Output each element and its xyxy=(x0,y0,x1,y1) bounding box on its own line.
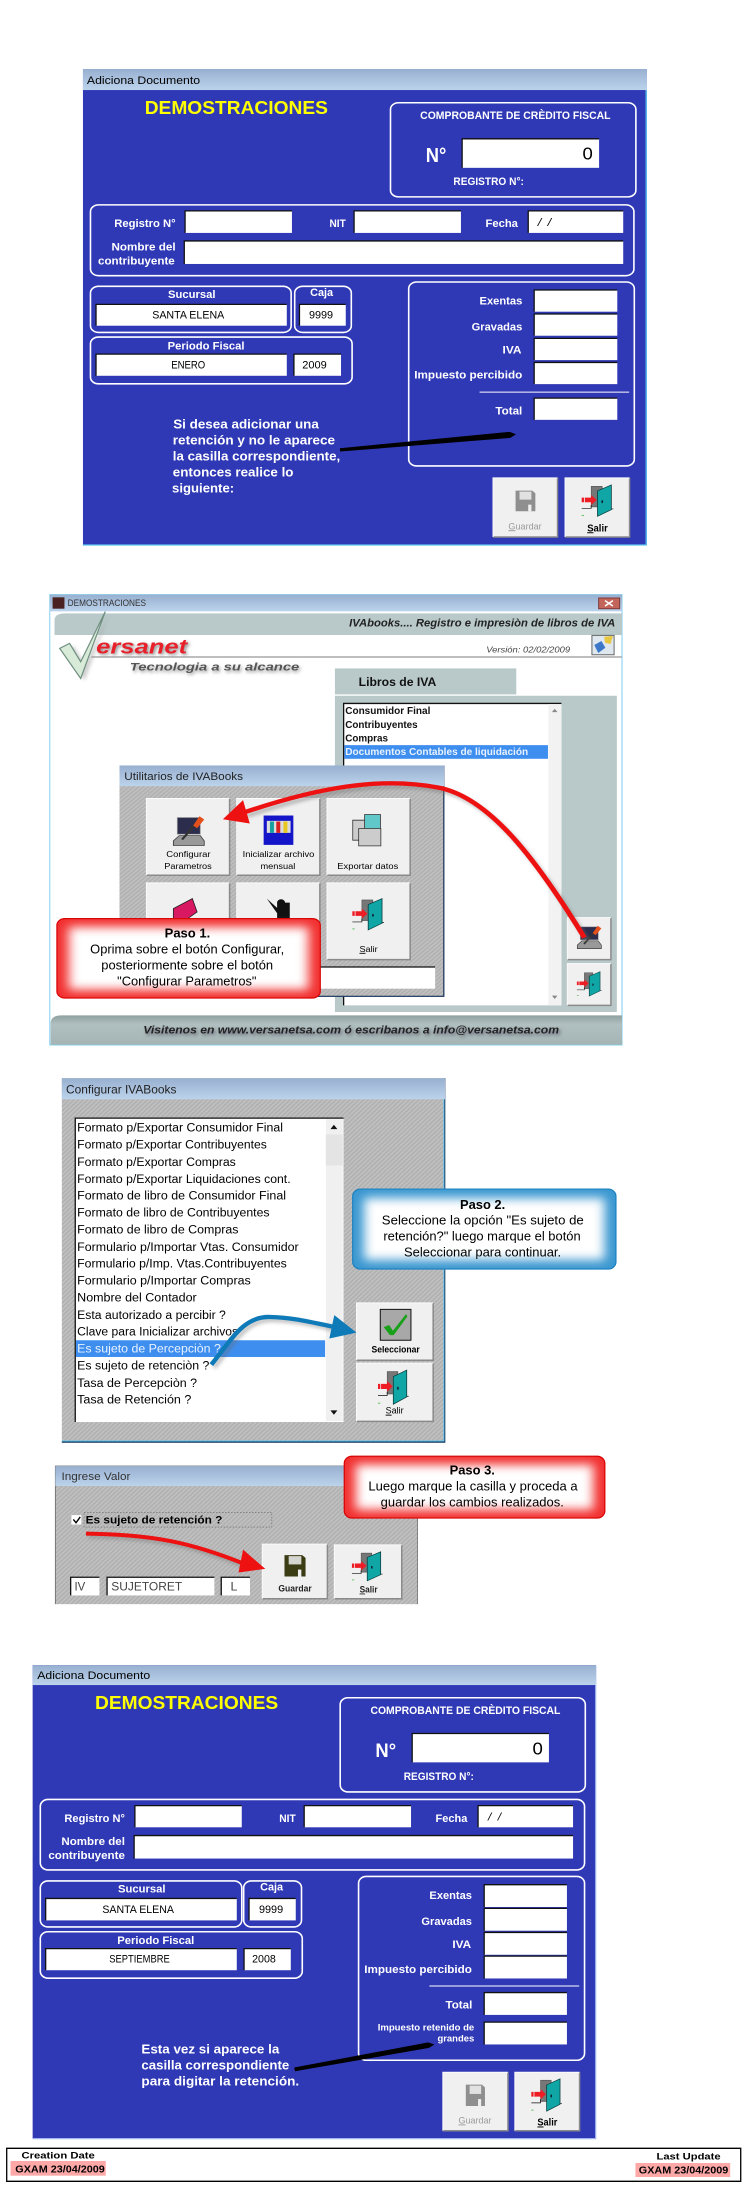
panel: totales: Impuesto percibido xyxy=(414,369,522,381)
header text: IVAbooks.... Registro e impresiòn de libros de IVA xyxy=(349,618,615,629)
logo text: ersanet xyxy=(98,637,191,660)
button: salir xyxy=(334,1545,402,1599)
panel: totales xyxy=(359,1876,585,2060)
panel: totales: IVA xyxy=(452,1939,471,1951)
button: guardar xyxy=(443,2072,508,2131)
panel: registro y contribuyente: Nombre del xyxy=(61,1836,125,1848)
callout: paso 2: Seleccione la opción "Es sujeto de xyxy=(382,1213,584,1228)
button: salir: Salir xyxy=(587,523,608,534)
panel: configurar window xyxy=(62,1078,445,1442)
callout: paso 1: posteriormente sobre el botón xyxy=(101,958,273,972)
callout: paso 3: Luego marque la casilla y proceda a xyxy=(368,1479,578,1494)
callout: paso 1 xyxy=(57,919,320,998)
input fields: IV xyxy=(74,1580,85,1594)
tagline: Tecnologia a su alcance xyxy=(131,662,301,675)
panel: periodo fiscal xyxy=(40,1932,302,1978)
panel: sucursal xyxy=(40,1881,242,1927)
list box: Esta autorizado a percibir ? xyxy=(77,1308,226,1322)
panel: footer dates xyxy=(7,2148,741,2181)
panel: totales: Total xyxy=(495,405,522,417)
panel: comprobante: COMPROBANTE DE CRÈDITO FISCAL xyxy=(370,1704,561,1717)
list box: Formato p/Exportar Contribuyentes xyxy=(77,1138,267,1152)
list box: Tasa de Retención ? xyxy=(77,1393,191,1406)
button: guardar xyxy=(493,478,558,537)
window edge xyxy=(33,1665,596,2139)
panel: utilitarios window: Inicializar archivo xyxy=(243,850,314,860)
list box: Es sujeto de Percepciòn ? xyxy=(77,1342,221,1356)
heading: DEMOSTRACIONES xyxy=(145,98,328,119)
text block: instruction: para digitar la retención. xyxy=(141,2074,299,2088)
arrow: black pointer xyxy=(294,2042,434,2071)
checkbox: Es sujeto de retención ? xyxy=(86,1515,223,1526)
panel: totales: IVA xyxy=(503,344,522,356)
checkbox xyxy=(71,1513,272,1527)
button: salir small xyxy=(567,964,611,1005)
creation date label: Creation Date xyxy=(22,2151,95,2161)
button: configurar small xyxy=(567,918,611,960)
panel: ingrese valor window xyxy=(55,1466,417,1604)
panel: comprobante: 0 xyxy=(582,145,593,164)
list box: Tasa de Percepciòn ? xyxy=(77,1376,197,1390)
button: salir xyxy=(515,2072,580,2131)
panel: periodo fiscal: Periodo Fiscal xyxy=(168,340,244,352)
button: seleccionar: Seleccionar xyxy=(371,1345,420,1356)
panel: comprobante xyxy=(390,103,636,197)
callout: paso 1: Paso 1. xyxy=(165,926,210,940)
panel: utilitarios window: Exportar datos xyxy=(337,862,399,872)
list box: Formato p/Exportar Consumidor Final xyxy=(77,1121,283,1135)
panel: final Adiciona Documento window xyxy=(33,1665,596,2139)
input fields: L xyxy=(230,1580,238,1594)
panel: registro y contribuyente: contribuyente xyxy=(48,1850,125,1862)
panel: registro y contribuyente: Fecha xyxy=(436,1813,468,1825)
panel: periodo fiscal: SEPTIEMBRE xyxy=(109,1954,170,1966)
button: guardar: Guardar xyxy=(459,2116,492,2126)
panel: totales: Exentas xyxy=(429,1890,472,1902)
button: guardar: Guardar xyxy=(278,1584,312,1593)
panel: periodo fiscal xyxy=(90,337,352,384)
panel: utilitarios window: Parametros xyxy=(164,862,212,872)
panel: caja: 9999 xyxy=(259,1904,283,1916)
button: salir xyxy=(357,1363,433,1421)
panel: totales: Gravadas xyxy=(472,321,523,333)
footer bar xyxy=(51,1015,622,1045)
panel: registro y contribuyente: / / xyxy=(487,1812,503,1823)
list box: Formato de libro de Consumidor Final xyxy=(77,1189,286,1203)
panel: comprobante: N° xyxy=(375,1741,396,1762)
panel: sucursal xyxy=(90,286,291,332)
panel: totales: Gravadas xyxy=(421,1916,472,1928)
panel: utilitarios window: Configurar xyxy=(166,850,211,860)
panel: registro y contribuyente xyxy=(40,1799,585,1870)
window background xyxy=(50,595,622,1045)
panel: registro y contribuyente: contribuyente xyxy=(98,255,175,267)
panel: comprobante: N° xyxy=(426,144,446,167)
list box: Clave para Inicializar archivos xyxy=(77,1325,238,1338)
button: salir: Salir xyxy=(386,1406,404,1417)
panel: comprobante xyxy=(340,1698,585,1792)
callout: paso 2: retención?" luego marque el botón xyxy=(383,1229,581,1244)
text block: instruction: la casilla correspondiente, xyxy=(173,449,340,463)
text block: instruction: casilla correspondiente xyxy=(141,2058,290,2072)
footer text: Visitenos en www.versanetsa.com ó escribanos a info@versanetsa.com xyxy=(145,1025,561,1038)
panel: comprobante: 0 xyxy=(532,1739,543,1758)
input fields: SUJETORET xyxy=(111,1580,183,1594)
panel: sucursal: SANTA ELENA xyxy=(102,1904,174,1916)
panel: periodo fiscal: Periodo Fiscal xyxy=(117,1935,194,1947)
list box: Nombre del Contador xyxy=(77,1291,197,1305)
tagline: Tecnologia a su alcance xyxy=(130,661,299,673)
panel: utilitarios window xyxy=(119,765,444,997)
panel: comprobante: COMPROBANTE DE CRÈDITO FISCAL xyxy=(420,110,611,122)
button: guardar xyxy=(262,1544,327,1599)
panel: configurar window: Configurar IVABooks xyxy=(66,1083,176,1096)
text block: instruction: entonces realice lo xyxy=(173,465,294,479)
text block: instruction xyxy=(172,417,340,495)
last update label: Last Update xyxy=(657,2152,721,2162)
icon: close button xyxy=(599,598,620,609)
list box: Formato p/Exportar Compras xyxy=(77,1155,236,1169)
panel: libros de IVA: Consumidor Final xyxy=(345,706,430,717)
panel: registro y contribuyente: Registro N° xyxy=(114,218,176,230)
panel: registro y contribuyente: Registro N° xyxy=(64,1813,125,1825)
panel: registro y contribuyente xyxy=(90,205,634,276)
header bar xyxy=(55,613,622,635)
list box: Formato de libro de Compras xyxy=(77,1223,238,1237)
panel: libros de IVA: Compras xyxy=(345,733,388,744)
panel: registro y contribuyente: NIT xyxy=(279,1813,296,1825)
panel: libros de IVA: Contribuyentes xyxy=(345,720,418,731)
callout: paso 3 xyxy=(344,1456,605,1518)
icon: application xyxy=(53,597,64,609)
creation date badge: GXAM 23/04/2009 xyxy=(15,2163,105,2175)
callout: paso 3: guardar los cambios realizados. xyxy=(381,1495,564,1510)
panel: ingrese valor window: Ingrese Valor xyxy=(61,1471,131,1483)
arrow: red pointer xyxy=(86,1534,265,1573)
panel: sucursal: Sucursal xyxy=(168,289,216,301)
list box: Es sujeto de retenciòn ? xyxy=(77,1359,209,1373)
list box: Formulario p/Imp. Vtas.Contribuyentes xyxy=(77,1257,287,1270)
arrow: black pointer xyxy=(340,432,516,452)
callout: paso 2 xyxy=(353,1189,616,1269)
panel: totales: Impuesto retenido de xyxy=(378,2023,474,2033)
panel: caja xyxy=(295,286,351,332)
panel: comprobante: REGISTRO N°: xyxy=(404,1771,474,1783)
callout: paso 2: Seleccionar para continuar. xyxy=(404,1245,561,1260)
panel: libros de IVA xyxy=(335,668,617,1012)
panel: first Adiciona Documento window xyxy=(83,69,647,545)
creation date badge xyxy=(11,2161,106,2176)
panel: totales: Impuesto percibido xyxy=(364,1964,472,1976)
callout: paso 1: Oprima sobre el botón Configurar, xyxy=(90,942,284,956)
list box xyxy=(75,1118,343,1422)
panel: caja: Caja xyxy=(310,287,334,299)
panel: utilitarios window: Utilitarios de IVABooks xyxy=(124,770,243,783)
callout: paso 1: "Configurar Parametros" xyxy=(117,974,257,988)
panel: periodo fiscal: ENERO xyxy=(171,359,205,371)
window title: Adiciona Documento xyxy=(37,1668,151,1682)
panel: caja xyxy=(244,1881,302,1927)
panel: totales xyxy=(409,282,634,466)
window background xyxy=(83,69,647,545)
panel: periodo fiscal: 2008 xyxy=(252,1954,276,1966)
panel: utilitarios window: Salir xyxy=(359,945,378,955)
text block: instruction xyxy=(141,2042,299,2088)
button: salir: Salir xyxy=(360,1585,378,1594)
panel: configurar and ingrese valor windows xyxy=(55,1078,616,1604)
panel: registro y contribuyente: NIT xyxy=(330,218,346,230)
panel: libros de IVA: Libros de IVA xyxy=(359,675,437,689)
button: salir: Salir xyxy=(537,2117,557,2128)
arrow: red curved pointer xyxy=(223,783,588,941)
last update badge xyxy=(635,2163,730,2177)
heading: DEMOSTRACIONES xyxy=(95,1693,278,1714)
panel: registro y contribuyente: Fecha xyxy=(485,218,518,230)
callout: paso 2: Paso 2. xyxy=(460,1197,505,1212)
panel: totales: Total xyxy=(446,2000,472,2012)
input fields xyxy=(71,1577,250,1595)
panel: totales: Exentas xyxy=(480,295,523,307)
footer frame xyxy=(7,2148,741,2181)
logo text: ersanet xyxy=(96,635,189,658)
version text: Versión: 02/02/2009 xyxy=(486,645,571,655)
window title: Adiciona Documento xyxy=(87,74,200,87)
panel: caja: 9999 xyxy=(309,309,333,321)
panel: periodo fiscal: 2009 xyxy=(302,359,327,371)
panel: comprobante: REGISTRO N°: xyxy=(453,176,524,188)
panel: utilitarios window: mensual xyxy=(260,862,295,872)
panel: caja: Caja xyxy=(260,1882,284,1893)
window edge xyxy=(83,69,646,545)
title bar xyxy=(83,69,647,90)
button: seleccionar xyxy=(357,1303,433,1360)
title bar xyxy=(50,595,622,611)
arrow: blue curved pointer xyxy=(211,1315,357,1368)
title bar xyxy=(33,1665,596,1685)
text block: instruction: siguiente: xyxy=(172,481,234,495)
text block: instruction: Si desea adicionar una xyxy=(173,417,319,431)
panel: sucursal: SANTA ELENA xyxy=(152,309,224,321)
window background xyxy=(33,1665,596,2139)
panel: main IVAbooks window xyxy=(50,595,622,1045)
footer text: Visitenos en www.versanetsa.com ó escribanos a info@versanetsa.com xyxy=(143,1024,559,1036)
list box: Formato de libro de Contribuyentes xyxy=(77,1206,270,1220)
panel: totales: grandes xyxy=(437,2034,474,2045)
text block: instruction: retención y no le aparece xyxy=(173,433,335,447)
list box: Formulario p/Importar Vtas. Consumidor xyxy=(77,1240,299,1254)
callout: paso 3: Paso 3. xyxy=(450,1463,495,1478)
panel: registro y contribuyente: Nombre del xyxy=(111,241,176,253)
text block: instruction: Esta vez si aparece la xyxy=(141,2042,280,2056)
window title: DEMOSTRACIONES xyxy=(68,599,146,609)
panel: registro y contribuyente: / / xyxy=(537,217,553,229)
button: salir xyxy=(565,478,630,537)
icon: help xyxy=(592,635,614,655)
logo: versanet check xyxy=(60,612,109,681)
panel: sucursal: Sucursal xyxy=(118,1884,166,1895)
panel: libros de IVA: Documentos Contables de liquidación xyxy=(345,747,528,758)
divider line xyxy=(91,656,622,658)
button: guardar: Guardar xyxy=(508,522,542,532)
list box: Formato p/Exportar Liquidaciones cont. xyxy=(77,1172,291,1186)
list box: Formulario p/Importar Compras xyxy=(77,1274,251,1288)
